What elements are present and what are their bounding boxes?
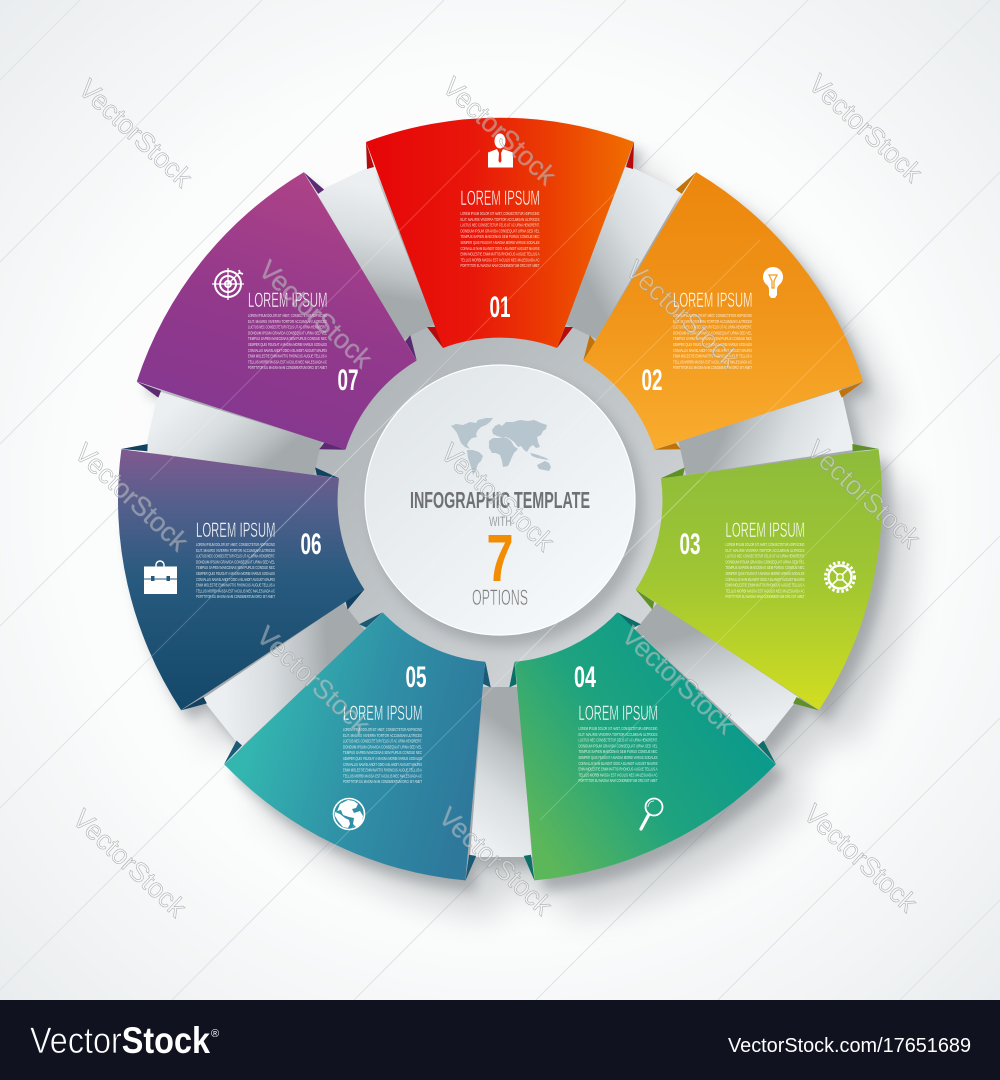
watermarks: VectorStock [437,71,562,191]
text block 07 [248,313,328,370]
watermarks [67,68,928,923]
watermarks: VectorStock [620,254,745,374]
number 04: 04 [574,661,596,694]
number 07: 07 [338,364,358,397]
panel: central disc [365,365,635,635]
heading 05: LOREM IPSUM [343,702,422,725]
panel: segment 01 [366,118,634,348]
icon: briefcase [144,561,177,594]
panel: segment 02 [535,172,863,510]
watermarks: VectorStock [798,798,923,918]
icon: businessman [488,134,513,168]
watermarks: VectorStock [251,620,376,740]
big number 7: 7 [486,521,514,596]
watermarks: VectorStock [435,437,560,557]
number 02: 02 [642,364,662,397]
watermarks: VectorStock [616,620,741,740]
number 03: 03 [680,528,700,561]
central disc shadow [370,372,644,646]
heading 01: LOREM IPSUM [460,187,540,210]
label: with: WITH [489,513,512,529]
icon: gear [826,562,854,592]
number 05: 05 [406,661,426,694]
heading 07: LOREM IPSUM [248,289,328,312]
overlay hairlines [130,150,880,860]
segment 02 shape [584,172,863,450]
segment 05 shape [224,612,485,880]
heading 06: LOREM IPSUM [196,519,276,542]
text block 01 [460,211,540,268]
title: INFOGRAPHIC TEMPLATE [410,487,590,513]
watermarks: VectorStock [803,68,928,188]
text block 04 [578,726,658,783]
heading 04: LOREM IPSUM [578,702,658,725]
panel: segment 05 [224,579,555,881]
panel: segment 06 [118,403,382,710]
footer image id: VectorStock.com/17651689 [728,1035,971,1057]
footer bar [0,1000,1000,1080]
watermarks: VectorStock [253,254,378,374]
icon: magnifier [641,798,662,829]
segment 03 shape [636,449,882,710]
segment 06 shape [118,449,364,710]
folded paper strips between segments [145,164,855,857]
text block 03 [726,542,805,599]
number 06: 06 [300,528,322,561]
panel: segment 04 [445,579,776,881]
footer registered mark: ® [211,1028,219,1040]
watermarks: VectorStock [73,73,198,193]
panel: segment 07 [137,172,465,510]
watermarks: VectorStock [69,437,194,557]
segment 01 shape [366,118,634,348]
icon: globe [334,798,364,830]
text block 02 [673,313,753,370]
icon: target [212,268,244,300]
footer logo: VectorStock [30,1020,210,1061]
text block 05 [343,727,423,784]
wheel drop shadows [127,129,914,916]
panel: segment 03 [618,403,882,710]
number 01: 01 [490,291,510,324]
heading 02: LOREM IPSUM [673,289,752,312]
ring behind the segments [305,305,695,695]
watermarks: VectorStock [433,801,558,921]
segment 07 shape [137,172,417,450]
segment 04 shape [515,612,776,880]
watermarks: VectorStock [67,803,192,923]
heading 03: LOREM IPSUM [726,519,805,542]
world map [451,418,551,475]
watermarks: VectorStock [801,434,926,554]
label: options: OPTIONS [472,585,528,610]
icon: light bulb [763,267,783,298]
text block 06 [196,542,276,599]
